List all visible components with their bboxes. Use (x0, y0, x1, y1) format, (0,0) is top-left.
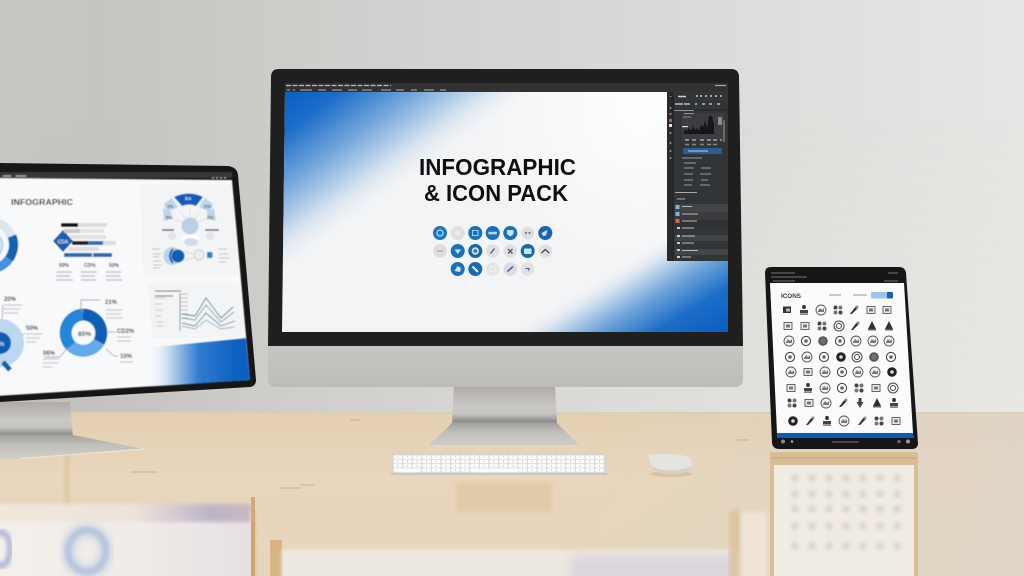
reflection: left monitor (0, 420, 256, 576)
horizontal bars (61, 223, 116, 257)
mouse (648, 454, 692, 477)
tablet bottom bar (781, 440, 910, 444)
callouts: 50% (26, 326, 39, 332)
blue magnifier (0, 319, 24, 370)
side tool panel (667, 92, 728, 261)
panel: radial chart: 0% (168, 234, 175, 239)
heading: INFOGRAPHIC (11, 197, 73, 207)
panel: radial chart: 2% (207, 215, 214, 220)
callouts: CD2% (117, 329, 135, 335)
main donut (66, 314, 101, 351)
donut top-left (0, 221, 14, 269)
wall background (0, 0, 1024, 412)
tablet screen (770, 283, 914, 438)
keyboard (391, 454, 607, 475)
callouts (4, 297, 135, 360)
monitor stand (430, 387, 578, 447)
tablet (765, 267, 918, 449)
title: INFOGRAPHIC (419, 154, 576, 180)
panel: radial chart (140, 184, 238, 275)
callouts: 21% (105, 300, 118, 306)
small percentages row: 50% (109, 263, 120, 269)
histogram (682, 113, 724, 142)
panel: radial chart: DA (185, 196, 192, 201)
diamond badge (53, 230, 73, 252)
diamond badge: CDA (58, 240, 69, 246)
reflection: main monitor (270, 482, 767, 576)
left monitor bezel (0, 163, 256, 402)
desk surface (0, 412, 1024, 576)
icon cluster (433, 226, 552, 276)
left screen (0, 172, 250, 397)
screen wallpaper (282, 92, 728, 332)
left monitor (0, 163, 256, 459)
small percentages row: 00% (59, 263, 70, 269)
tablet body (765, 267, 918, 449)
callouts: 20% (4, 297, 17, 303)
panel: radial chart: D% (204, 204, 211, 209)
title (419, 154, 576, 206)
panel: radial chart: 2% (167, 204, 174, 209)
small percentages row (59, 263, 120, 269)
monitor chin (268, 346, 743, 387)
tablet icon grid (783, 305, 900, 426)
title: & ICON PACK (424, 180, 568, 206)
donut value: 85% (78, 331, 91, 338)
tablet status bar (771, 273, 898, 281)
callouts: 15% (120, 354, 133, 360)
main monitor (268, 69, 743, 447)
tablet heading: ICONS (781, 294, 801, 300)
gradient corner (145, 338, 250, 387)
left monitor stand (0, 402, 144, 459)
app title bar (285, 83, 728, 92)
callouts: 06% (43, 351, 56, 357)
panel: line chart (148, 283, 245, 338)
panel: radial chart: 0% (206, 234, 213, 239)
panel: radial chart: 8% (166, 215, 173, 220)
small percentages row: CD% (84, 263, 96, 269)
monitor bezel (268, 69, 743, 346)
reflection: tablet (770, 452, 918, 576)
